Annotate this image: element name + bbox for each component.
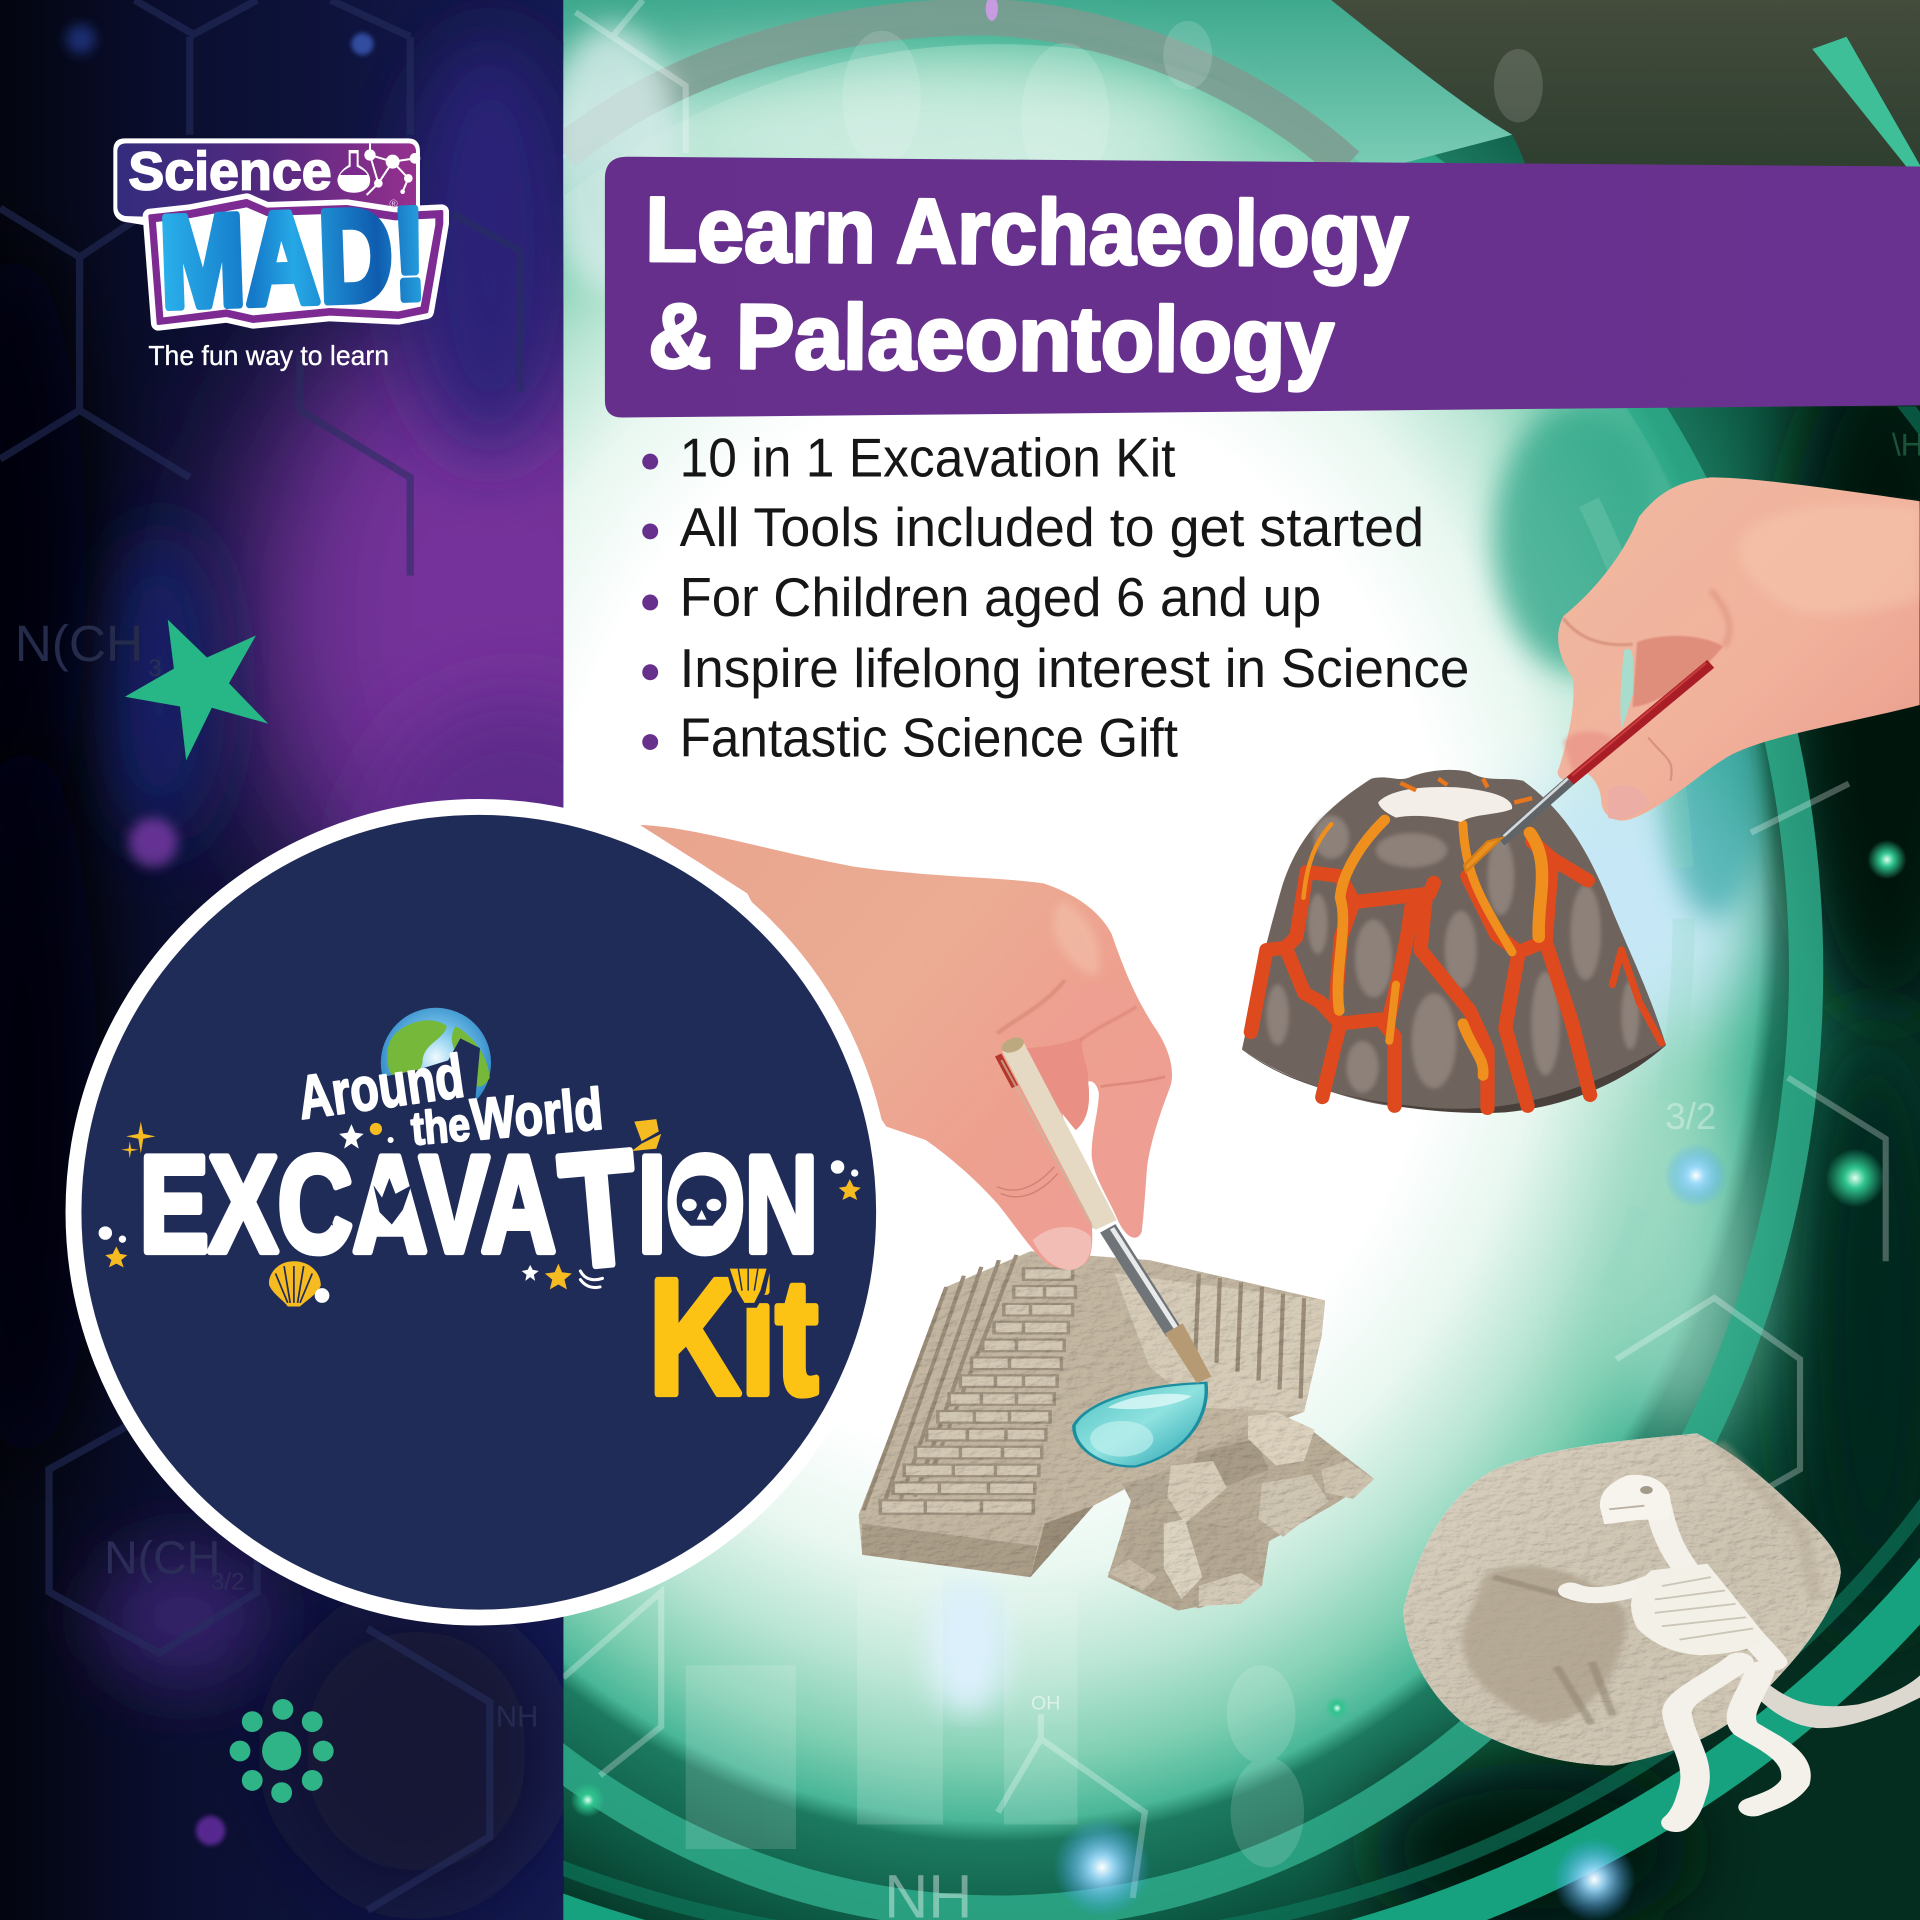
logo text: Excavation: ION	[638, 1128, 818, 1281]
logo text: Around the World: World	[468, 1077, 606, 1153]
feature bullet list: All Tools included to get started	[680, 496, 1424, 558]
decorative stars and dots	[99, 1119, 861, 1303]
badge circle: Around the World Excavation Kit	[73, 807, 884, 1618]
left background panel: 3	[148, 655, 162, 682]
right-top olive corner	[1331, 0, 1920, 407]
pyramid dig block with gem	[859, 1251, 1374, 1611]
icon: green star	[125, 620, 268, 760]
purple title banner	[605, 157, 1920, 418]
icon: brush on the letter i	[725, 1264, 771, 1308]
feature bullet list: 10 in 1 Excavation Kit	[680, 426, 1176, 488]
logo text: Around the World: the	[409, 1098, 472, 1155]
logo flask and molecule	[337, 143, 420, 195]
volcano model with paint brush and hand	[1242, 477, 1920, 1113]
hand holding red paint brush	[1464, 477, 1920, 872]
left background panel: 3/2	[211, 1568, 245, 1595]
logo word MAD: MAD!	[157, 180, 429, 335]
feature bullet list: Inspire lifelong interest in Science	[680, 637, 1469, 699]
logo text: Around the World	[294, 1042, 606, 1155]
right background panel	[563, 0, 1920, 1920]
heading: Learn Archaeology & Palaeontology: & Palaeontology	[648, 285, 1335, 392]
volcano crater	[1378, 787, 1512, 822]
left background panel: NH	[496, 1701, 538, 1734]
icon: dinosaur footprint	[373, 1178, 411, 1224]
glass gem	[1074, 1383, 1206, 1466]
icon: globe	[367, 1008, 491, 1139]
dinosaur skeleton	[1571, 1475, 1920, 1823]
fossil rock with dinosaur skeleton	[1404, 1433, 1920, 1823]
left background panel: N(CH	[15, 614, 143, 672]
feature bullet list	[642, 426, 1469, 769]
feature bullet list: For Children aged 6 and up	[680, 566, 1321, 628]
icon: scallop shell	[269, 1261, 321, 1307]
icon: green dot cluster	[230, 1699, 334, 1803]
volcano	[1242, 770, 1666, 1113]
upper teal sweep	[563, 0, 1512, 171]
logo word Science: Science	[128, 142, 332, 201]
logo text: Excavation: T	[554, 1117, 644, 1303]
logo registered mark: ®	[389, 198, 398, 210]
wooden excavation brush	[998, 1034, 1211, 1383]
logo: Science Mad	[113, 138, 442, 371]
heading: Learn Archaeology & Palaeontology	[644, 179, 1409, 393]
logo tagline: The fun way to learn	[148, 340, 389, 371]
left background panel	[0, 0, 564, 1920]
crumbled rubble	[1108, 1412, 1374, 1611]
logo text: Around the World: Around	[294, 1042, 468, 1132]
heading: Learn Archaeology & Palaeontology: Learn Archaeology	[645, 179, 1409, 286]
hand holding brush over pyramid	[640, 825, 1211, 1383]
feature bullet list: Fantastic Science Gift	[680, 707, 1178, 769]
icon: skull	[677, 1176, 727, 1226]
logo text: Excavation: EXCAVA	[140, 1128, 556, 1281]
logo text: Excavation	[140, 1117, 818, 1303]
red paint brush	[1464, 663, 1711, 872]
left background panel: N(CH	[104, 1531, 220, 1583]
rock	[1404, 1433, 1841, 1766]
logo text: Kit: Kit	[649, 1244, 818, 1428]
right background panel: 3/2	[1665, 1096, 1716, 1137]
lava veins	[1251, 841, 1662, 1108]
right background panel: OH	[1031, 1692, 1060, 1714]
